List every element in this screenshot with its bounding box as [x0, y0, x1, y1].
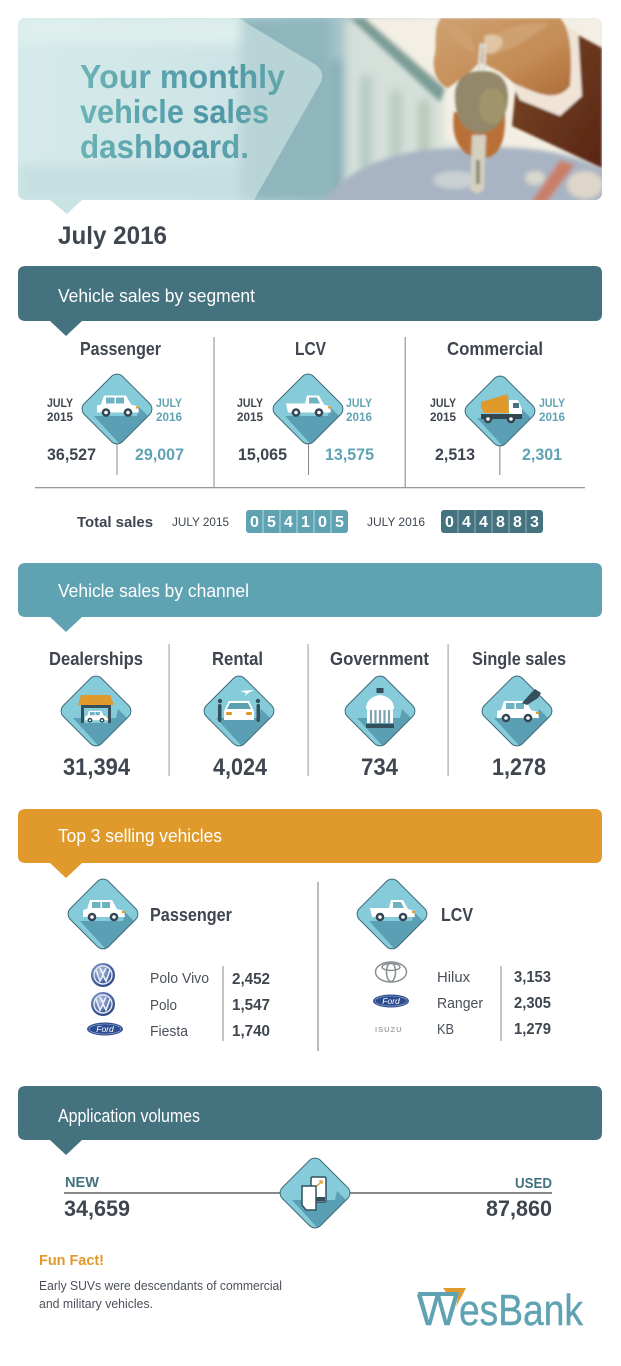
fun fact text: Early SUVs were descendants of commercial: [39, 1279, 282, 1293]
panel: application volumes: 87,860: [486, 1196, 552, 1221]
segment: commercial: [430, 339, 565, 475]
panel: top LCV vehicles: [354, 876, 551, 1041]
hero title: vehicle sales: [80, 93, 269, 130]
total sales row: 4: [462, 514, 471, 531]
segment: passenger: [47, 339, 184, 475]
panel: application volumes: 34,659: [64, 1196, 130, 1221]
total sales row: 1: [301, 514, 310, 531]
segment: passenger: JULY: [156, 396, 182, 410]
shirt cuff: [513, 26, 582, 116]
fun fact heading: Fun Fact!: [39, 1252, 104, 1269]
total sales row: 4: [284, 514, 293, 531]
segment: LCV: [237, 339, 374, 475]
segment: LCV: 2015: [237, 410, 263, 424]
total sales row: 0: [445, 514, 454, 531]
logo: Ford: [373, 994, 409, 1008]
segment: LCV: 13,575: [325, 445, 374, 464]
panel: top LCV vehicles: 1,279: [514, 1021, 551, 1038]
channel: rental: 4,024: [213, 754, 268, 781]
total sales row: 8: [496, 514, 505, 531]
banner: application volumes: [18, 1086, 602, 1155]
hero title: [80, 58, 286, 165]
channel: dealerships: 31,394: [63, 754, 131, 781]
icon: documents: [302, 1177, 326, 1210]
segment: passenger: 2016: [156, 410, 182, 424]
panel: top passenger vehicles: Passenger: [150, 905, 232, 925]
segment: passenger: 36,527: [47, 445, 96, 464]
banner: top 3 selling vehicles: Top 3 selling vehicles: [58, 826, 222, 846]
icon: dealership: [78, 695, 114, 723]
segment: LCV: 2016: [346, 410, 372, 424]
total sales row: [77, 510, 543, 533]
hero pointer: [50, 200, 82, 214]
segment: commercial: 2,513: [435, 445, 475, 464]
segment: commercial: JULY: [430, 396, 456, 410]
finger behind key: [453, 112, 505, 158]
segment: commercial: 2015: [430, 410, 456, 424]
panel: segment: [35, 337, 585, 488]
hero title: dashboard.: [80, 128, 249, 165]
panel: top LCV vehicles: LCV: [441, 905, 473, 925]
key blade: [470, 135, 486, 194]
logo: Ford: [87, 1022, 123, 1036]
channel: rental: Rental: [212, 649, 263, 669]
channel: government: 734: [361, 754, 399, 781]
total sales row: JULY 2015: [172, 515, 229, 529]
segment: commercial: 2016: [539, 410, 565, 424]
banner: vehicle sales by segment: [18, 266, 602, 336]
total sales row: 0: [318, 514, 327, 531]
panel: top LCV vehicles: Ranger: [437, 995, 483, 1012]
total sales row: JULY 2016: [367, 515, 425, 529]
segment: passenger: 2015: [47, 410, 73, 424]
channel: government: [330, 649, 429, 781]
banner: vehicle sales by channel: Vehicle sales by channel: [58, 581, 249, 601]
divider: [318, 882, 319, 1051]
total sales row: 5: [267, 514, 276, 531]
hand: [434, 18, 571, 95]
channel: single sales: [472, 649, 566, 781]
panel: top LCV vehicles: Hilux: [437, 969, 470, 986]
channel: dealerships: [49, 649, 143, 781]
banner: application volumes: Application volumes: [58, 1106, 200, 1126]
logo: WesBank: [417, 1286, 584, 1335]
channel: single sales: 1,278: [492, 754, 546, 781]
icon: truck: [481, 394, 522, 423]
total sales row: 4: [479, 514, 488, 531]
hero title: Your monthly: [80, 58, 286, 95]
total sales row: 8: [513, 514, 522, 531]
panel: application volumes: [64, 1155, 552, 1235]
total sales row: Total sales: [77, 514, 153, 531]
segment: passenger: JULY: [47, 396, 73, 410]
panel: top passenger vehicles: Polo: [150, 997, 177, 1014]
panel: top passenger vehicles: [65, 876, 270, 1041]
logo: Volkswagen: [91, 992, 115, 1016]
banner: vehicle sales by segment: Vehicle sales by segment: [58, 286, 255, 306]
key head: [455, 71, 508, 133]
fun fact text: and military vehicles.: [39, 1297, 153, 1311]
hero banner: [18, 18, 610, 214]
total sales row: 5: [335, 514, 344, 531]
panel: top LCV vehicles: 3,153: [514, 969, 551, 986]
total sales row: 0: [250, 514, 259, 531]
panel: top LCV vehicles: 2,305: [514, 995, 551, 1012]
month heading: July 2016: [58, 222, 167, 250]
channel: single sales: Single sales: [472, 649, 566, 669]
logo: Isuzu: ISUZU: [375, 1025, 402, 1034]
icon: pen: [522, 689, 541, 705]
banner: top 3 selling vehicles: [18, 809, 602, 878]
segment: LCV: 15,065: [238, 445, 287, 464]
channel: dealerships: Dealerships: [49, 649, 143, 669]
segment: passenger: 29,007: [135, 445, 184, 464]
logo: WesBank: esBank: [459, 1286, 584, 1335]
panel: application volumes: USED: [515, 1175, 552, 1192]
panel: application volumes: NEW: [65, 1174, 100, 1191]
panel: top passenger vehicles: Fiesta: [150, 1023, 189, 1040]
fun fact text: [39, 1279, 282, 1311]
segment: passenger: Passenger: [80, 339, 161, 359]
segment: LCV: JULY: [346, 396, 372, 410]
icon: rental car: [218, 690, 260, 722]
segment: commercial: JULY: [539, 396, 565, 410]
segment: LCV: LCV: [295, 339, 326, 359]
segment: LCV: JULY: [237, 396, 263, 410]
panel: top passenger vehicles: 2,452: [232, 971, 270, 988]
panel: top passenger vehicles: 1,547: [232, 997, 270, 1014]
banner: vehicle sales by channel: [18, 563, 602, 632]
channel: government: Government: [330, 649, 429, 669]
segment: commercial: 2,301: [522, 445, 562, 464]
channel: rental: [201, 649, 281, 781]
suit sleeve: [512, 28, 602, 168]
panel: top passenger vehicles: Polo Vivo: [150, 970, 209, 987]
total sales row: 3: [530, 514, 539, 531]
panel: top passenger vehicles: 1,740: [232, 1023, 270, 1040]
panel: channels: [49, 644, 566, 781]
logo: Toyota: [376, 962, 406, 982]
icon: government building: [366, 688, 394, 728]
logo: Volkswagen: [91, 963, 115, 987]
logo: WesBank: W: [417, 1286, 459, 1335]
panel: top LCV vehicles: KB: [437, 1021, 454, 1038]
segment: commercial: Commercial: [447, 339, 543, 359]
